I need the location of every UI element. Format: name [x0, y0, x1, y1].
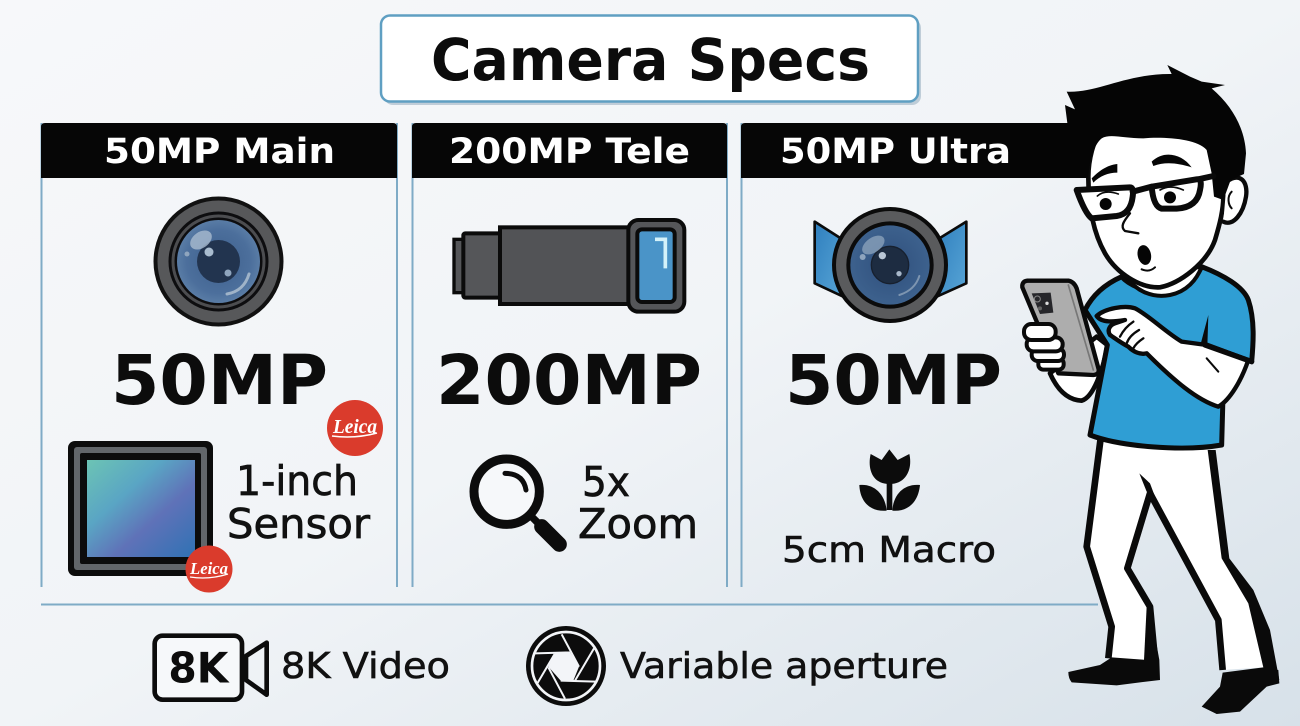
feature: Variable aperture — [526, 626, 948, 706]
label: 1-inch Sensor: Sensor — [227, 500, 370, 548]
hair — [1010, 65, 1246, 200]
badge: Leica top — [327, 400, 383, 456]
character upper body and head — [1010, 65, 1253, 448]
label: 8K Video: 8K Video — [281, 646, 450, 687]
feature: 8K Video — [155, 636, 450, 700]
icon: 1-inch sensor — [68, 441, 213, 576]
right arm and pointing hand — [1097, 307, 1248, 407]
panel: 50MP Main — [41, 123, 397, 592]
glasses — [1077, 187, 1133, 218]
panel: 200MP Tele — [412, 123, 727, 587]
label: 5x Zoom — [578, 458, 698, 548]
left arm — [1050, 337, 1107, 401]
right shoe — [1202, 667, 1279, 714]
title: Camera Specs — [431, 26, 870, 94]
eyebrows — [1092, 164, 1117, 183]
character: man with phone — [1010, 65, 1279, 714]
left shoe — [1068, 657, 1160, 685]
mouth — [1136, 244, 1153, 266]
title — [381, 16, 921, 105]
head — [1088, 128, 1223, 287]
panel header: 200MP Tele — [412, 123, 727, 178]
icon: 8K video camera: 8K — [168, 644, 230, 693]
panel header: 200MP Tele: 200MP Tele — [449, 132, 690, 172]
icon: tulip macro — [859, 449, 920, 511]
icon: 8K video camera — [155, 636, 267, 700]
label: 1-inch Sensor — [227, 457, 370, 548]
icon: ultra-wide lens — [815, 209, 966, 321]
shirt — [1085, 267, 1253, 448]
neck — [1127, 267, 1202, 296]
icon: magnifier — [474, 459, 559, 544]
ear — [1223, 178, 1246, 223]
label: Variable aperture: Variable aperture — [620, 646, 948, 687]
icon: telephoto lens — [454, 220, 684, 312]
phone-holding fingers — [1038, 358, 1064, 370]
phone — [1022, 281, 1099, 375]
eyes — [1100, 198, 1112, 210]
panel header: 50MP Main: 50MP Main — [104, 132, 335, 172]
label: 1-inch Sensor: 1-inch — [236, 457, 358, 505]
metric: 200MP: 200MP — [436, 341, 702, 421]
label: 5cm Macro: 5cm Macro — [782, 530, 996, 571]
icon: aperture — [526, 626, 606, 706]
character legs — [1068, 438, 1279, 714]
badge: Leica sensor: Leica — [189, 559, 228, 578]
metric: 50MP: 50MP — [785, 341, 1002, 421]
panel header: 50MP Main — [41, 123, 397, 178]
metric: 50MP: 50MP — [111, 341, 328, 421]
panel header: 50MP Ultra: 50MP Ultra — [780, 132, 1011, 172]
badge: Leica top: Leica — [332, 416, 377, 438]
panel: 50MP Ultra — [741, 123, 1090, 587]
label: 5x Zoom: 5x — [582, 458, 630, 506]
badge: Leica sensor — [186, 546, 232, 592]
icon: main camera lens — [154, 196, 284, 326]
label: 5x Zoom: Zoom — [578, 500, 698, 548]
panel header: 50MP Ultra — [741, 123, 1090, 178]
nose — [1123, 213, 1138, 233]
